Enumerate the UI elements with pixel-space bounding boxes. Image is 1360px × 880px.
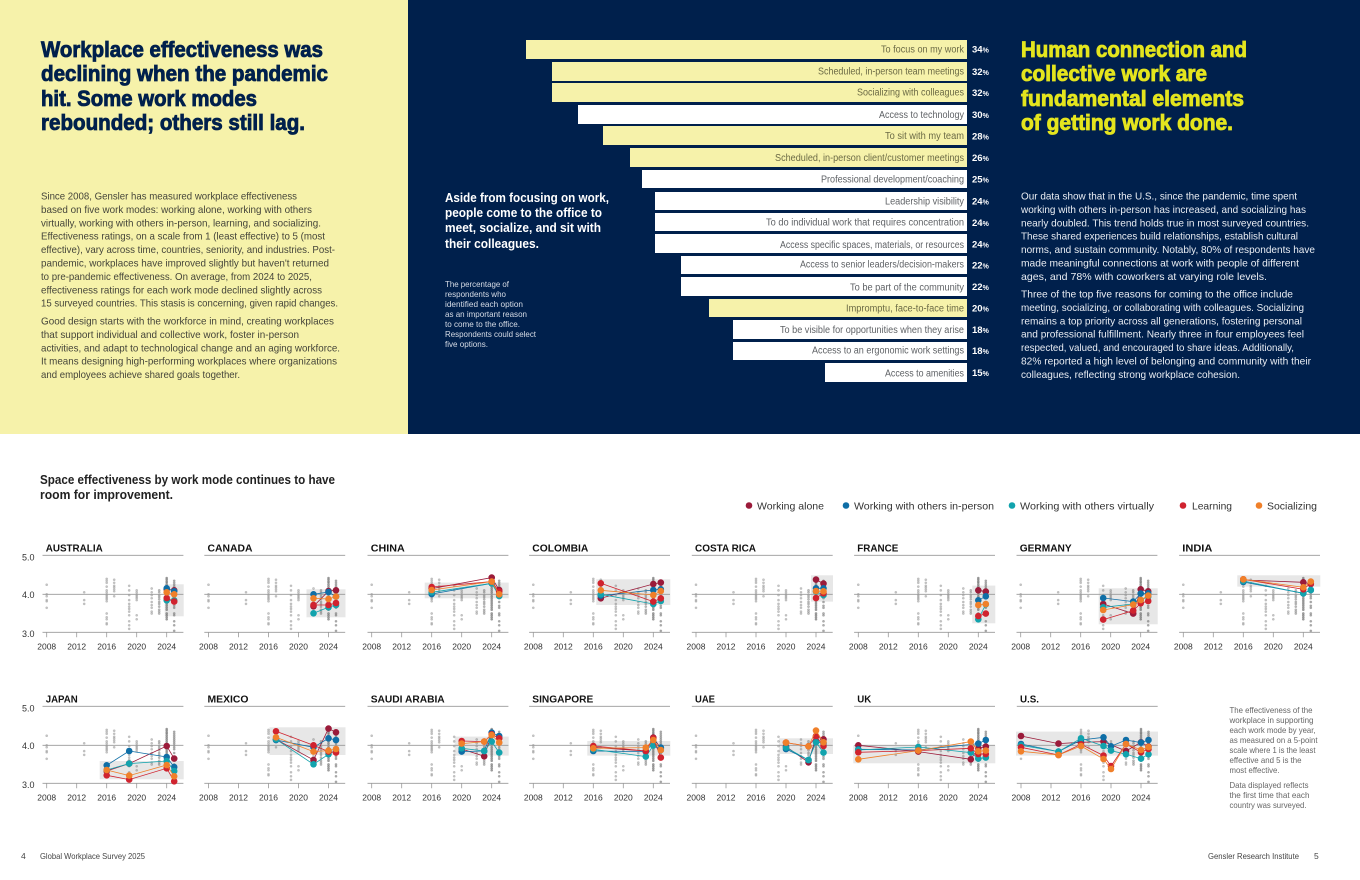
chart: Costa Rica: 2020 — [777, 641, 796, 651]
chart: Germany: 2020 — [1101, 641, 1120, 651]
chart: Canada: 2008 — [199, 641, 218, 651]
text block: chart explanation: The effectiveness of the — [1230, 705, 1313, 715]
chart: UAE: 2020 — [777, 792, 796, 802]
text block: aside callout: their colleagues. — [445, 237, 539, 251]
chart: Saudi Arabia: 2024 — [482, 792, 501, 802]
heading: workplace effectiveness: declining when the pandemic — [41, 61, 328, 86]
legend: work modes: Working with others virtually — [1020, 500, 1155, 512]
chart: Germany: 2016 — [1071, 641, 1090, 651]
footer: right: Gensler Research Institute — [1208, 851, 1299, 861]
chart: India: 2008 — [1174, 641, 1193, 651]
text block: intro body: to pre-pandemic effectiveness. On average, from 2024 to 2025, — [41, 271, 312, 283]
chart: Singapore: SINGAPORE — [532, 694, 594, 705]
heading: space effectiveness — [40, 473, 335, 502]
chart: India: INDIA — [1182, 543, 1212, 554]
bar chart: reasons for coming to the office: 24% — [972, 240, 990, 250]
chart: Australia: 2020 — [127, 641, 146, 651]
y-axis labels: top row: 5.0 — [22, 552, 35, 562]
bar chart: reasons for coming to the office: Impromptu, face-to-face time — [846, 304, 964, 314]
chart: Canada — [199, 543, 346, 651]
chart: UAE: 2024 — [807, 792, 826, 802]
bar chart: reasons for coming to the office: 34% — [972, 44, 990, 56]
chart: Mexico: 2008 — [199, 792, 218, 802]
footer: right: 5 — [1314, 851, 1319, 861]
y-axis labels: top row: 4.0 — [22, 590, 35, 600]
chart: Saudi Arabia: 2016 — [422, 792, 441, 802]
chart: UAE: 2008 — [687, 792, 706, 802]
chart: UK: 2012 — [879, 792, 898, 802]
bar chart: reasons for coming to the office: Scheduled, in-person client/customer meetings — [775, 153, 964, 164]
text block: chart note: as an important reason — [445, 309, 527, 319]
chart: France: 2008 — [849, 641, 868, 651]
chart: Canada: CANADA — [208, 543, 252, 554]
chart: Costa Rica: 2012 — [717, 641, 736, 651]
text block: chart explanation: country was surveyed. — [1230, 800, 1306, 810]
chart: Mexico: 2016 — [259, 792, 278, 802]
bar chart: reasons for coming to the office: 32% — [972, 88, 990, 99]
heading: human connection: of getting work done. — [1021, 110, 1233, 135]
bar chart: reasons for coming to the office: 15% — [972, 368, 990, 379]
chart: Germany: 2012 — [1041, 641, 1060, 651]
text block: chart explanation: the first time that each — [1230, 790, 1310, 800]
bar chart: reasons for coming to the office: Access to senior leaders/decision-makers — [800, 260, 964, 270]
chart: Colombia: 2024 — [644, 641, 663, 651]
legend: work modes: Working alone — [757, 500, 824, 512]
text block: intro body: and employees achieve shared goals together. — [41, 369, 240, 381]
chart: UAE: 2012 — [717, 792, 736, 802]
heading: human connection: collective work are — [1021, 61, 1207, 86]
text block: chart explanation: each work mode by year, — [1230, 725, 1316, 735]
y-axis labels: bottom row: 3.0 — [22, 780, 35, 790]
text block: right body: remains a top priority across all generations, fostering personal — [1021, 315, 1302, 327]
chart: China: 2016 — [422, 641, 441, 651]
chart: UAE — [687, 694, 833, 802]
chart: U.S.: 2020 — [1102, 792, 1121, 802]
chart: India: 2012 — [1204, 641, 1223, 651]
y-axis labels: bottom row — [22, 704, 35, 790]
chart: UK: 2008 — [849, 792, 868, 802]
bar chart: reasons for coming to the office: 22% — [972, 282, 990, 293]
chart: Australia: 2024 — [157, 641, 176, 651]
chart: Saudi Arabia — [362, 694, 509, 802]
chart: U.S.: 2024 — [1132, 792, 1151, 802]
y-axis labels: top row: 3.0 — [22, 629, 35, 639]
text block: intro body: that support individual and collective work, foster in-person — [41, 329, 299, 341]
chart: Germany — [1011, 543, 1158, 651]
chart: France: 2024 — [969, 641, 988, 651]
chart: Australia: 2016 — [97, 641, 116, 651]
chart: Saudi Arabia: SAUDI ARABIA — [371, 694, 445, 705]
legend: work modes: Learning — [1192, 500, 1232, 512]
bar chart: reasons for coming to the office: 24% — [972, 196, 990, 208]
text block: intro body: effective), vary across time, countries, seniority, and industries. Post- — [41, 244, 335, 256]
text block: right body: These shared experiences build relationships, establish cultural — [1021, 231, 1298, 243]
heading: human connection: fundamental elements — [1021, 86, 1244, 111]
chart: Costa Rica: COSTA RICA — [695, 543, 756, 554]
text block: right body: working with others in-person has increased, and socializing has — [1020, 204, 1306, 216]
text block: right body: 82% reported a high level of belonging and community with their — [1021, 356, 1311, 368]
chart: Japan: 2016 — [97, 792, 116, 802]
chart: Singapore: 2008 — [524, 792, 543, 802]
chart: Colombia — [524, 543, 670, 651]
chart: UAE: UAE — [695, 694, 715, 705]
chart: Singapore: 2024 — [644, 792, 663, 802]
text block: chart explanation: workplace in supporting — [1229, 715, 1314, 725]
chart: Mexico: MEXICO — [208, 694, 249, 705]
chart: Germany: 2024 — [1131, 641, 1150, 651]
text block: right body: meeting, socializing, or collaborating with colleagues. Socializing — [1021, 302, 1304, 314]
bar chart: reasons for coming to the office: Access to amenities — [885, 368, 964, 380]
chart: Australia: 2012 — [67, 641, 86, 651]
text block: intro body: Effectiveness ratings, on a scale from 1 (least effective) to 5 (most — [41, 231, 325, 243]
chart: Saudi Arabia: 2012 — [392, 792, 411, 802]
chart: Saudi Arabia: 2008 — [362, 792, 381, 802]
chart: Mexico: 2020 — [289, 792, 308, 802]
text block: aside callout: meet, socialize, and sit with — [445, 221, 601, 235]
chart: Colombia: 2008 — [524, 641, 543, 651]
text block: intro body: activities, and adapt to technological change and an aging workforce. — [41, 342, 340, 354]
heading: workplace effectiveness: rebounded; others still lag. — [41, 110, 305, 135]
bar chart: reasons for coming to the office: Access to technology — [879, 110, 964, 121]
chart: Canada: 2016 — [259, 641, 278, 651]
chart: France: 2012 — [879, 641, 898, 651]
text block: right body: made meaningful connections at work with people of different — [1021, 258, 1299, 270]
text block: chart note: identified each option — [445, 299, 523, 309]
text block: chart note: Respondents could select — [445, 329, 537, 339]
chart: China: 2008 — [362, 641, 381, 651]
text block: chart note: to come to the office. — [445, 319, 520, 329]
chart: Colombia: 2012 — [554, 641, 573, 651]
text block: right body: and professional fulfillment. Nearly three in four employees feel — [1021, 329, 1304, 341]
chart: Singapore: 2016 — [584, 792, 603, 802]
text block: right body: respected, valued, and encouraged to share ideas. Additionally, — [1021, 342, 1294, 354]
chart: Costa Rica: 2008 — [687, 641, 706, 651]
chart: India: 2024 — [1294, 641, 1313, 651]
bar chart: reasons for coming to the office: 30% — [972, 110, 990, 121]
bar chart: reasons for coming to the office: To be part of the community — [850, 282, 964, 294]
chart: Saudi Arabia: 2020 — [452, 792, 471, 802]
chart: UK: 2024 — [969, 792, 988, 802]
text block: chart explanation: scale where 1 is the least — [1230, 745, 1316, 755]
chart: UK — [849, 694, 995, 802]
chart: Costa Rica: 2016 — [747, 641, 766, 651]
chart: Mexico: 2024 — [319, 792, 338, 802]
bar chart: reasons for coming to the office: 18% — [972, 325, 990, 336]
text block: aside callout: Aside from focusing on work, — [445, 191, 609, 205]
bar chart: reasons for coming to the office: 24% — [972, 218, 990, 229]
bar chart: reasons for coming to the office: To sit with my team — [885, 131, 964, 142]
chart: Germany: GERMANY — [1020, 543, 1072, 554]
bar chart: reasons for coming to the office: 25% — [972, 174, 990, 186]
text block: chart note — [445, 279, 537, 349]
text block: aside callout — [445, 191, 609, 251]
chart: Canada: 2020 — [289, 641, 308, 651]
bar chart: reasons for coming to the office: 22% — [972, 260, 990, 272]
chart: Mexico: 2012 — [229, 792, 248, 802]
bar chart: reasons for coming to the office: Access to an ergonomic work settings — [812, 346, 964, 356]
heading: space effectiveness: room for improvement. — [40, 488, 173, 502]
chart: Singapore — [524, 694, 670, 802]
y-axis labels: bottom row: 4.0 — [22, 741, 35, 751]
chart: Costa Rica — [687, 543, 833, 651]
text block: right body: ages, and 78% with coworkers at varying role levels. — [1021, 271, 1267, 283]
heading: space effectiveness: Space effectiveness by work mode continues to have — [40, 473, 335, 487]
bar chart: reasons for coming to the office: To be visible for opportunities when they arise — [780, 325, 964, 336]
chart: France — [849, 543, 995, 651]
chart: U.S.: 2008 — [1012, 792, 1031, 802]
chart: France: FRANCE — [857, 543, 899, 554]
text block: intro body — [41, 190, 340, 381]
chart: Colombia: 2016 — [584, 641, 603, 651]
text block: right body: Three of the top five reasons for coming to the office include — [1021, 288, 1293, 300]
chart: Australia: 2008 — [37, 641, 56, 651]
chart: Canada: 2012 — [229, 641, 248, 651]
chart: Singapore: 2012 — [554, 792, 573, 802]
bar chart: reasons for coming to the office: Access specific spaces, materials, or resources — [780, 240, 964, 251]
chart: China — [362, 543, 509, 651]
chart: India — [1174, 543, 1320, 651]
bar chart: reasons for coming to the office: Socializing with colleagues — [857, 88, 964, 98]
text block: right body — [1020, 190, 1315, 381]
chart: UK: 2020 — [939, 792, 958, 802]
chart: India: 2016 — [1234, 641, 1253, 651]
chart: Colombia: COLOMBIA — [532, 543, 588, 554]
chart: U.S.: U.S. — [1020, 694, 1039, 705]
chart: U.S.: 2016 — [1072, 792, 1091, 802]
footer: left: Global Workplace Survey 2025 — [40, 851, 145, 861]
text block: chart note: The percentage of — [445, 279, 510, 289]
text block: chart explanation: most effective. — [1230, 765, 1280, 775]
text block: chart explanation: effective and 5 is the — [1230, 755, 1302, 765]
heading: workplace effectiveness: hit. Some work modes — [41, 86, 257, 111]
bar chart: reasons for coming to the office: Professional development/coaching — [821, 174, 964, 186]
bar chart: reasons for coming to the office: To do individual work that requires concentration — [766, 218, 964, 228]
text block: right body: norms, and sustain community. Notably, 80% of respondents have — [1021, 244, 1315, 256]
chart: Japan: 2012 — [67, 792, 86, 802]
text block: chart note: five options. — [445, 339, 488, 349]
text block: intro body: based on five work modes: working alone, working with others — [41, 204, 312, 216]
text block: chart note: respondents who — [445, 289, 506, 299]
chart: Australia: AUSTRALIA — [46, 543, 103, 554]
chart: Japan: 2020 — [127, 792, 146, 802]
heading: workplace effectiveness: Workplace effectiveness was — [41, 37, 323, 62]
chart: China: CHINA — [371, 543, 405, 554]
y-axis labels: top row — [22, 552, 35, 639]
heading: human connection: Human connection and — [1021, 37, 1247, 62]
text block: intro body: effectiveness ratings for each work mode declined slightly across — [41, 284, 322, 296]
bar chart: reasons for coming to the office: 20% — [972, 304, 990, 314]
chart: Canada: 2024 — [319, 641, 338, 651]
chart: Mexico — [199, 694, 346, 802]
chart: India: 2020 — [1264, 641, 1283, 651]
text block: chart explanation: as measured on a 5-point — [1230, 735, 1318, 745]
chart: Germany: 2008 — [1011, 641, 1030, 651]
chart: Costa Rica: 2024 — [807, 641, 826, 651]
chart: Japan — [37, 694, 184, 802]
bar chart: reasons for coming to the office: 28% — [972, 132, 990, 142]
bar chart: reasons for coming to the office — [526, 40, 990, 382]
chart: Singapore: 2020 — [614, 792, 633, 802]
heading: human connection — [1021, 37, 1247, 135]
chart: UAE: 2016 — [747, 792, 766, 802]
chart: Colombia: 2020 — [614, 641, 633, 651]
chart: China: 2024 — [482, 641, 501, 651]
chart: Japan: JAPAN — [46, 694, 78, 705]
chart: China: 2020 — [452, 641, 471, 651]
legend: work modes — [746, 500, 1317, 512]
text block: right body: colleagues, reflecting strong workplace cohesion. — [1021, 369, 1240, 381]
chart: U.S. — [1012, 694, 1158, 802]
panel: navy chart background — [408, 0, 1360, 434]
text block: intro body: Since 2008, Gensler has measured workplace effectiveness — [41, 190, 297, 202]
text block: intro body: pandemic, workplaces have improved slightly but haven't returned — [41, 258, 329, 270]
text block: right body: nearly doubled. This trend holds true in most surveyed countries. — [1021, 217, 1309, 229]
heading: workplace effectiveness — [41, 37, 328, 135]
text block: intro body: 15 surveyed countries. This stasis is concerning, given rapid changes. — [41, 298, 338, 310]
chart: Japan: 2008 — [37, 792, 56, 802]
footer: left: 4 — [21, 851, 26, 861]
chart: France: 2016 — [909, 641, 928, 651]
chart: U.S.: 2012 — [1042, 792, 1061, 802]
bar chart: reasons for coming to the office: Scheduled, in-person team meetings — [818, 66, 964, 78]
text block: intro body: Good design starts with the workforce in mind, creating workplaces — [41, 316, 334, 328]
text block: aside callout: people come to the office to — [445, 206, 602, 220]
panel: yellow intro background — [0, 0, 408, 434]
text block: chart explanation: Data displayed reflects — [1230, 780, 1308, 790]
bar chart: reasons for coming to the office: To focus on my work — [881, 44, 965, 56]
chart: UK: 2016 — [909, 792, 928, 802]
bar chart: reasons for coming to the office: 32% — [972, 67, 990, 78]
chart: Japan: 2024 — [157, 792, 176, 802]
bar chart: reasons for coming to the office: Leadership visibility — [885, 196, 964, 208]
legend: work modes: Working with others in-person — [854, 500, 994, 512]
chart: France: 2020 — [939, 641, 958, 651]
chart: Australia — [37, 543, 184, 651]
text block: intro body: It means designing high-performing workplaces where organizations — [41, 356, 337, 368]
chart: UK: UK — [857, 694, 872, 705]
bar chart: reasons for coming to the office: 26% — [972, 153, 990, 164]
bar chart: reasons for coming to the office: 18% — [972, 346, 990, 357]
legend: work modes: Socializing — [1267, 500, 1317, 512]
text block: right body: Our data show that in the U.S., since the pandemic, time spent — [1021, 190, 1297, 202]
chart: China: 2012 — [392, 641, 411, 651]
text block: chart explanation — [1229, 705, 1318, 810]
y-axis labels: bottom row: 5.0 — [22, 704, 35, 714]
text block: intro body: virtually, working with others in-person, learning, and socializing. — [41, 217, 321, 229]
